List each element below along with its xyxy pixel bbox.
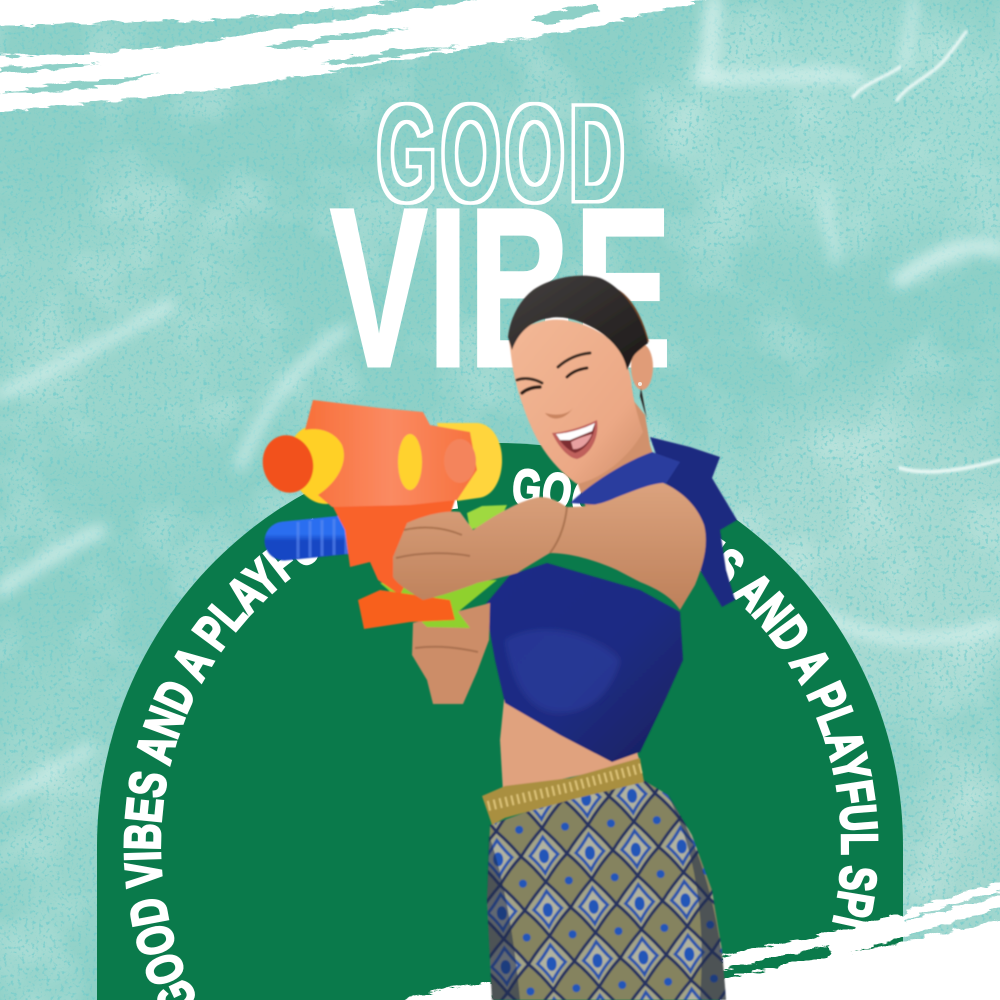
skirt	[487, 778, 726, 1000]
gun: salmon round	[444, 439, 476, 483]
neck	[575, 400, 665, 520]
gun: middle body	[332, 500, 455, 595]
brush stroke: bottom	[375, 880, 1000, 1000]
fingers	[396, 507, 567, 652]
ear	[631, 344, 653, 390]
mouth	[552, 420, 597, 459]
gun: blue barrel	[284, 534, 353, 541]
gun: trigger base	[358, 590, 455, 629]
top: body	[485, 563, 683, 762]
top: highlight	[505, 630, 620, 713]
skirt shading	[487, 795, 726, 1000]
eyes and brows	[517, 353, 590, 393]
gold waist chain	[482, 758, 644, 825]
gun: main body	[305, 400, 477, 507]
hair	[508, 276, 648, 370]
title: VIBE solid: VIBE	[330, 162, 672, 415]
lower hand	[412, 603, 490, 704]
top: scarf	[570, 452, 680, 505]
midriff	[500, 690, 640, 792]
top: ruffle	[650, 437, 737, 607]
green gun grip	[380, 505, 507, 628]
brush stroke: top	[0, 0, 745, 114]
curved arch text: second run: GOOD VIBES AND A PLAYFUL SPI	[513, 468, 878, 927]
nose shadow	[545, 408, 573, 419]
gun: yellow dial	[398, 434, 422, 490]
title: GOOD outline: GOOD	[377, 78, 629, 230]
hair bun	[613, 287, 649, 342]
hair strand	[640, 388, 647, 420]
gun: yellow muzzle ring	[278, 417, 362, 513]
gun: barrel ribs	[298, 518, 346, 558]
brush stroke: top teal streaks	[0, 4, 600, 94]
earring	[638, 382, 642, 386]
person with water gun	[256, 276, 737, 1000]
face	[509, 320, 643, 484]
green arch	[97, 443, 903, 1000]
water gun	[256, 400, 502, 629]
gun: yellow rear tank	[437, 423, 502, 501]
arm	[393, 483, 706, 610]
title	[330, 78, 672, 415]
gun: red nozzle	[256, 430, 320, 498]
